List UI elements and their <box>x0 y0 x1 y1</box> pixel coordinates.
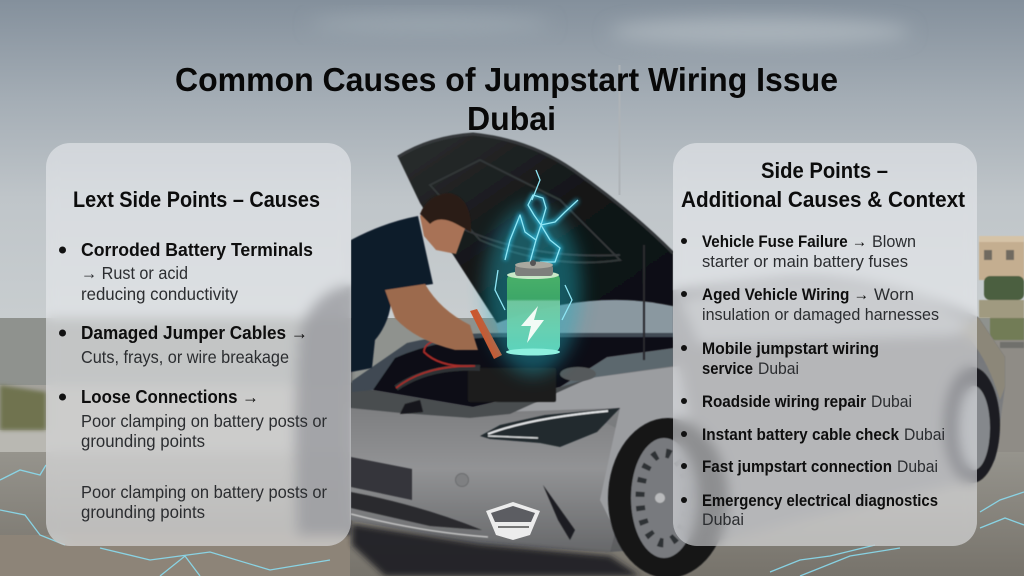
item: emergency electrical diagnostics: Emergency electrical diagnostics <box>702 491 938 510</box>
cause: loose connections <box>59 387 327 451</box>
item: aged vehicle wiring: insulation or damaged harnesses <box>702 305 939 324</box>
cause: damaged jumper cables: Cuts, frays, or wire breakage <box>81 347 289 367</box>
panel: right side additional causes <box>673 143 977 546</box>
cause: loose connections: Loose Connections → <box>81 387 259 407</box>
front fender <box>500 366 690 530</box>
item: aged vehicle wiring <box>681 285 939 324</box>
item: fast jumpstart connection: Dubai <box>897 457 938 476</box>
open hood <box>398 134 673 360</box>
windshield <box>490 295 673 340</box>
cause: corroded battery terminals: Corroded Battery Terminals <box>81 240 313 260</box>
lightning above battery <box>495 170 578 320</box>
cause: damaged jumper cables: Damaged Jumper Cables → <box>81 323 308 343</box>
item: fast jumpstart connection: Fast jumpstart connection <box>702 457 892 476</box>
cause: corroded battery terminals: → Rust or acid <box>81 263 188 283</box>
right panel heading <box>681 158 965 212</box>
item: vehicle fuse failure <box>681 232 916 271</box>
repeated note <box>81 482 327 522</box>
cause: loose connections: grounding points <box>81 431 205 451</box>
lightning glow above battery <box>505 195 578 262</box>
license plate and grille <box>351 457 575 540</box>
torso <box>351 216 433 372</box>
title: Dubai <box>467 100 556 137</box>
lightning bolt <box>521 306 544 343</box>
roof and rear glass <box>680 281 980 345</box>
title <box>175 61 838 137</box>
mechanic <box>351 193 478 372</box>
car body <box>350 277 1005 552</box>
neck and face <box>420 198 466 254</box>
sky <box>0 0 1024 330</box>
cause: corroded battery terminals <box>59 240 313 304</box>
item: mobile jumpstart wiring service: Mobile jumpstart wiring <box>702 339 879 358</box>
man's shadow silhouette behind left panel <box>295 285 351 535</box>
cause: loose connections: Poor clamping on battery posts or <box>81 411 327 431</box>
wheels <box>608 317 1005 576</box>
headlight <box>480 408 620 447</box>
item: emergency electrical diagnostics <box>681 491 938 529</box>
shield badge <box>486 502 540 540</box>
left panel heading: Lext Side Points – Causes <box>73 187 320 212</box>
arm <box>385 284 478 350</box>
repeated note: Poor clamping on battery posts or <box>81 482 327 502</box>
cause: corroded battery terminals: reducing conductivity <box>81 284 238 304</box>
front bumper <box>350 400 640 552</box>
item: mobile jumpstart wiring service: Dubai <box>758 359 799 378</box>
item: roadside wiring repair: Dubai <box>871 392 912 411</box>
item: instant battery cable check: Instant battery cable check <box>702 425 899 444</box>
item: instant battery cable check: Dubai <box>904 425 945 444</box>
battery icon <box>506 260 560 356</box>
hair <box>420 193 471 232</box>
car shadow on ground <box>352 524 640 576</box>
side of car under right panel <box>673 335 978 548</box>
item: emergency electrical diagnostics: Dubai <box>702 510 744 529</box>
cause: damaged jumper cables <box>59 323 308 367</box>
item: vehicle fuse failure: Blown <box>872 232 916 251</box>
item: roadside wiring repair: Roadside wiring repair <box>702 392 866 411</box>
item: aged vehicle wiring: Aged Vehicle Wiring → <box>702 285 869 304</box>
right panel heading: Side Points – <box>761 158 888 183</box>
item: mobile jumpstart wiring service: service <box>702 359 753 378</box>
item: vehicle fuse failure: Vehicle Fuse Failure → <box>702 232 867 251</box>
battery glow <box>485 205 581 375</box>
repeated note: grounding points <box>81 502 205 522</box>
ground lightning <box>0 465 1024 576</box>
title: Common Causes of Jumpstart Wiring Issue <box>175 61 838 98</box>
ground and horizon <box>0 318 1024 576</box>
building and trees right <box>979 236 1024 348</box>
item: vehicle fuse failure: starter or main battery fuses <box>702 252 908 271</box>
cowl plastic <box>350 378 590 418</box>
item: mobile jumpstart wiring service <box>681 339 879 378</box>
jumper clamp <box>470 309 502 359</box>
engine bay <box>352 333 673 414</box>
panel: left side causes <box>46 143 351 546</box>
item: aged vehicle wiring: Worn <box>874 285 914 304</box>
